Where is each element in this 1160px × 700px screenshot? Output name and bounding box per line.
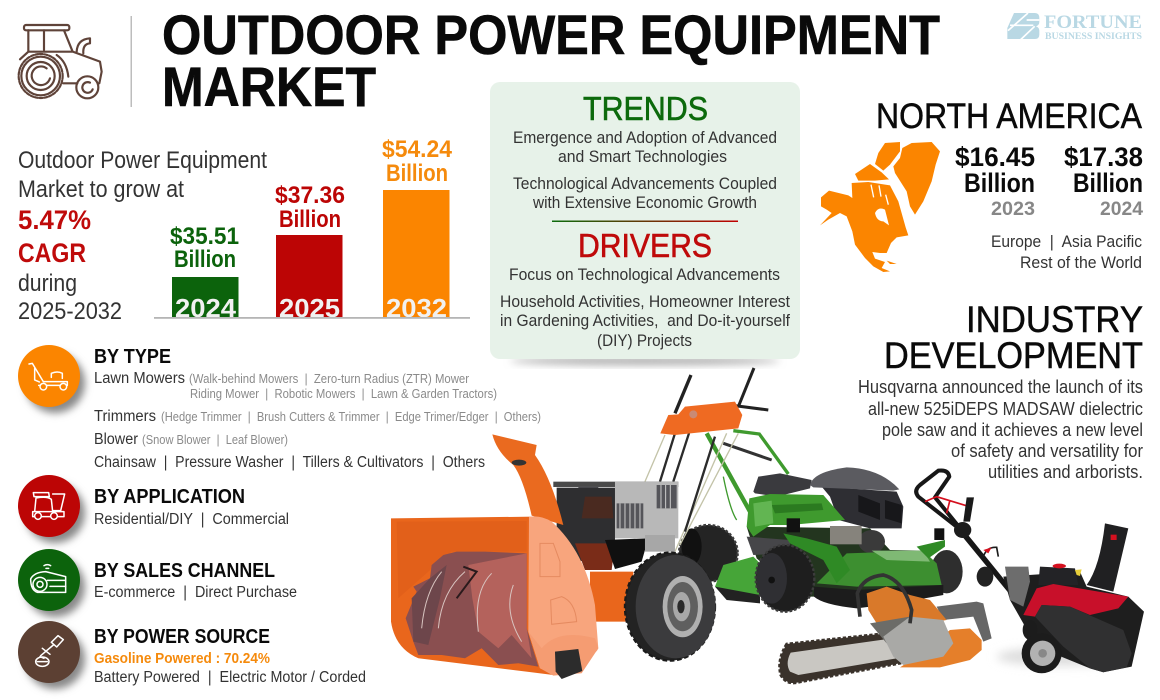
bar: 2025: 2025 — [279, 293, 340, 323]
segment: by sales channel — [18, 549, 297, 617]
text: industry development body: utilities and arborists. — [988, 462, 1143, 482]
icon: tractor — [19, 25, 102, 98]
text: by type items: Lawn Mowers — [94, 370, 185, 387]
text: other regions: Rest of the World — [1020, 253, 1142, 272]
text: by type items: (Snow Blower | Leaf Blower) — [142, 432, 288, 447]
icon: string trimmer — [36, 636, 63, 666]
icon: ride-on mower — [33, 493, 65, 519]
text: drivers list: Focus on Technological Advancements — [509, 265, 780, 284]
bar: 2032: $54.24 — [382, 136, 453, 163]
stat: 2023 North America: 2023 — [991, 199, 1035, 220]
stat: 2024 North America: $17.38 — [1064, 142, 1143, 172]
segment: by sales channel: BY SALES CHANNEL — [94, 560, 275, 582]
heading: industry development: INDUSTRY — [966, 299, 1143, 340]
heading: trends: TRENDS — [583, 90, 708, 127]
text: CAGR summary: during — [18, 270, 77, 297]
heading: drivers: DRIVERS — [578, 227, 712, 264]
text: CAGR summary: 2025-2032 — [18, 298, 122, 325]
text: other power sources: Battery Powered | Electric Motor / Corded — [94, 669, 366, 686]
illustration: red snow blower — [916, 470, 1144, 673]
heading: North America: NORTH AMERICA — [876, 97, 1143, 136]
stat: 2024 North America: Billion — [1073, 168, 1143, 198]
text: by type items: Riding Mower | Robotic Mowers | Lawn & Garden Tractors) — [190, 386, 497, 401]
text: gasoline share: Gasoline Powered : 70.24% — [94, 651, 270, 667]
icon: logo mark — [1007, 13, 1039, 40]
bar: 2032 — [382, 136, 453, 323]
text: by type items: Trimmers — [94, 408, 156, 425]
text: by type items — [94, 370, 541, 471]
panel: trends and drivers — [490, 82, 800, 359]
text: trends list: Technological Advancements Coupled — [513, 174, 777, 193]
panel shadow — [510, 357, 780, 365]
bar: 2024: $35.51 — [170, 223, 239, 250]
segment: by type — [18, 345, 541, 471]
text: sales channel items: E-commerce | Direct Purchase — [94, 584, 297, 601]
text: trends list: and Smart Technologies — [558, 147, 727, 166]
bar: 2032: 2032 — [386, 293, 447, 323]
bar: 2024 — [170, 223, 239, 323]
segment: by power source — [18, 621, 366, 689]
text: drivers list: in Gardening Activities, and Do-it-yourself — [500, 311, 790, 330]
text: other regions: Europe | Asia Pacific — [991, 232, 1142, 251]
logo: Fortune Business Insights: FORTUNE — [1044, 12, 1142, 33]
bar chart: market size — [154, 136, 470, 323]
bar: 2025: Billion — [279, 206, 341, 233]
text: trends list — [513, 128, 777, 212]
icon: robotic mower — [31, 565, 66, 592]
title — [162, 3, 940, 118]
text: by type items: (Walk-behind Mowers | Zero-turn Radius (ZTR) Mower — [189, 371, 470, 386]
title: MARKET — [162, 55, 376, 118]
stat: 2023 North America: $16.45 — [955, 142, 1035, 172]
text: other regions — [991, 232, 1142, 272]
segment: by power source: BY POWER SOURCE — [94, 626, 270, 648]
text: by type items: Chainsaw | Pressure Washer | Tillers & Cultivators | Others — [94, 454, 485, 471]
text: by type items: Blower — [94, 431, 138, 448]
illustration: snow blower — [391, 368, 768, 679]
text: trends list: with Extensive Economic Growth — [532, 193, 757, 212]
text: industry development body — [858, 377, 1143, 482]
text: CAGR summary: Outdoor Power Equipment — [18, 147, 267, 174]
illustration: chainsaw — [780, 575, 992, 683]
bar: 2024: Billion — [174, 246, 236, 273]
segment: by application: BY APPLICATION — [94, 486, 245, 508]
bar: 2024: 2024 — [175, 293, 237, 323]
text: CAGR summary: CAGR — [18, 238, 86, 268]
header divider — [130, 16, 132, 107]
bar: 2032: Billion — [386, 160, 448, 187]
text: by type items: (Hedge Trimmer | Brush Cutters & Trimmer | Edge Trimer/Edger | Others) — [161, 409, 541, 424]
icon: lawn mower — [29, 363, 67, 390]
heading: industry development: DEVELOPMENT — [884, 335, 1143, 376]
logo: Fortune Business Insights: BUSINESS INSIGHTS — [1045, 32, 1142, 42]
heading: industry development — [884, 299, 1143, 376]
stat: 2024 North America: 2024 — [1100, 199, 1143, 220]
illustration: lawn mower — [679, 431, 963, 612]
text: CAGR summary: 5.47% — [18, 205, 91, 235]
text: CAGR summary — [18, 147, 267, 325]
logo: Fortune Business Insights — [1007, 12, 1142, 42]
text: industry development body: of safety and versatility for — [951, 441, 1143, 461]
text: drivers list: (DIY) Projects — [597, 331, 692, 350]
stat: 2023 North America — [955, 142, 1035, 220]
bar: 2025 — [275, 182, 345, 323]
bar: 2025: $37.36 — [275, 182, 345, 209]
segment: by type: BY TYPE — [94, 346, 171, 368]
map: North America — [820, 142, 940, 272]
stat: 2024 North America — [1064, 142, 1143, 220]
text: drivers list — [500, 265, 790, 350]
text: drivers list: Household Activities, Homeowner Interest — [500, 292, 790, 311]
text: application items: Residential/DIY | Commercial — [94, 511, 289, 528]
text: CAGR summary: Market to grow at — [18, 176, 184, 203]
stat: 2023 North America: Billion — [964, 168, 1035, 198]
segment: by application — [18, 475, 289, 543]
title: OUTDOOR POWER EQUIPMENT — [162, 3, 940, 66]
text: trends list: Emergence and Adoption of Advanced — [513, 128, 777, 147]
